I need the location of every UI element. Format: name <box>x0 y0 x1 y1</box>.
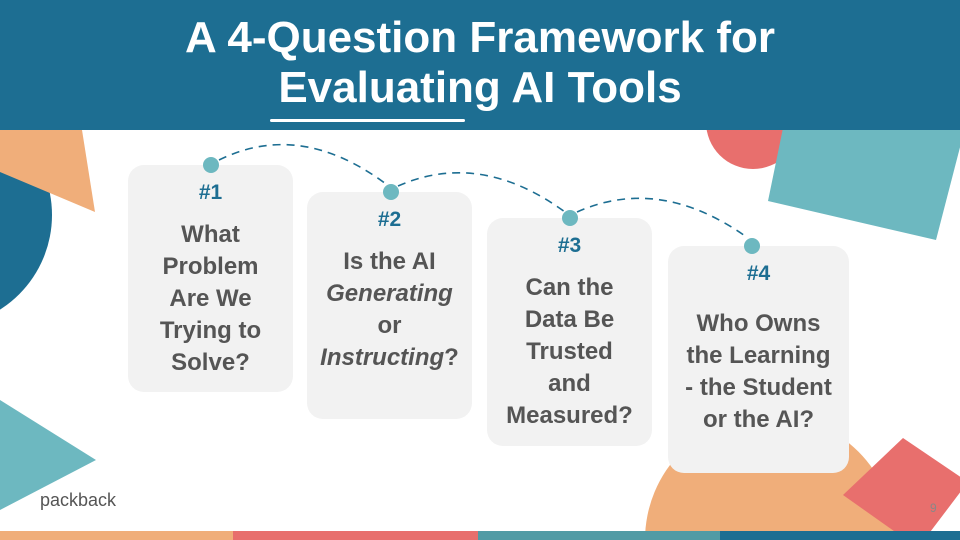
shape: teal square <box>768 128 960 240</box>
header: Evaluating AI Tools <box>278 63 682 112</box>
card 4: - the Student <box>685 374 832 401</box>
card 2: Is the AI <box>343 248 436 275</box>
page number: 9 <box>930 501 937 515</box>
card 4: the Learning <box>686 342 830 369</box>
card 3: #3 <box>558 234 581 257</box>
card 1 <box>128 165 293 392</box>
card 1: Trying to <box>160 317 261 344</box>
card 4: #4 <box>747 262 770 285</box>
card 2 <box>307 192 472 419</box>
card 2: Instructing? <box>320 344 459 371</box>
card 3: Trusted <box>526 338 613 365</box>
card 1: Problem <box>162 253 259 280</box>
card 2: or <box>378 312 402 339</box>
shape: orange triangle <box>0 130 95 212</box>
card 1: #1 <box>199 181 222 204</box>
bottom strip <box>0 531 233 540</box>
card 4: or the AI? <box>703 406 814 433</box>
shape: red circle <box>706 75 800 169</box>
logo: packback: packback <box>40 490 116 510</box>
card 4 <box>668 246 849 473</box>
shape: blue circle left <box>0 103 52 327</box>
card 2: #2 <box>378 208 401 231</box>
card 1: Are We <box>169 285 252 312</box>
card 3: Measured? <box>506 402 633 429</box>
shape: teal triangle left <box>0 400 96 510</box>
dashed connectors <box>219 145 748 238</box>
header <box>0 0 960 130</box>
shape: orange circle <box>645 415 895 540</box>
card 1: What <box>181 221 240 248</box>
header: A 4-Question Framework for <box>185 13 775 62</box>
card 1: Solve? <box>171 349 250 376</box>
card 3 <box>487 218 652 446</box>
shape: red square <box>843 438 960 540</box>
card 2: Generating <box>326 280 453 307</box>
card 4: Who Owns <box>696 310 820 337</box>
card 3: Can the <box>525 274 614 301</box>
underline stroke <box>270 119 465 122</box>
card 3: Data Be <box>525 306 614 333</box>
card 3: and <box>548 370 591 397</box>
